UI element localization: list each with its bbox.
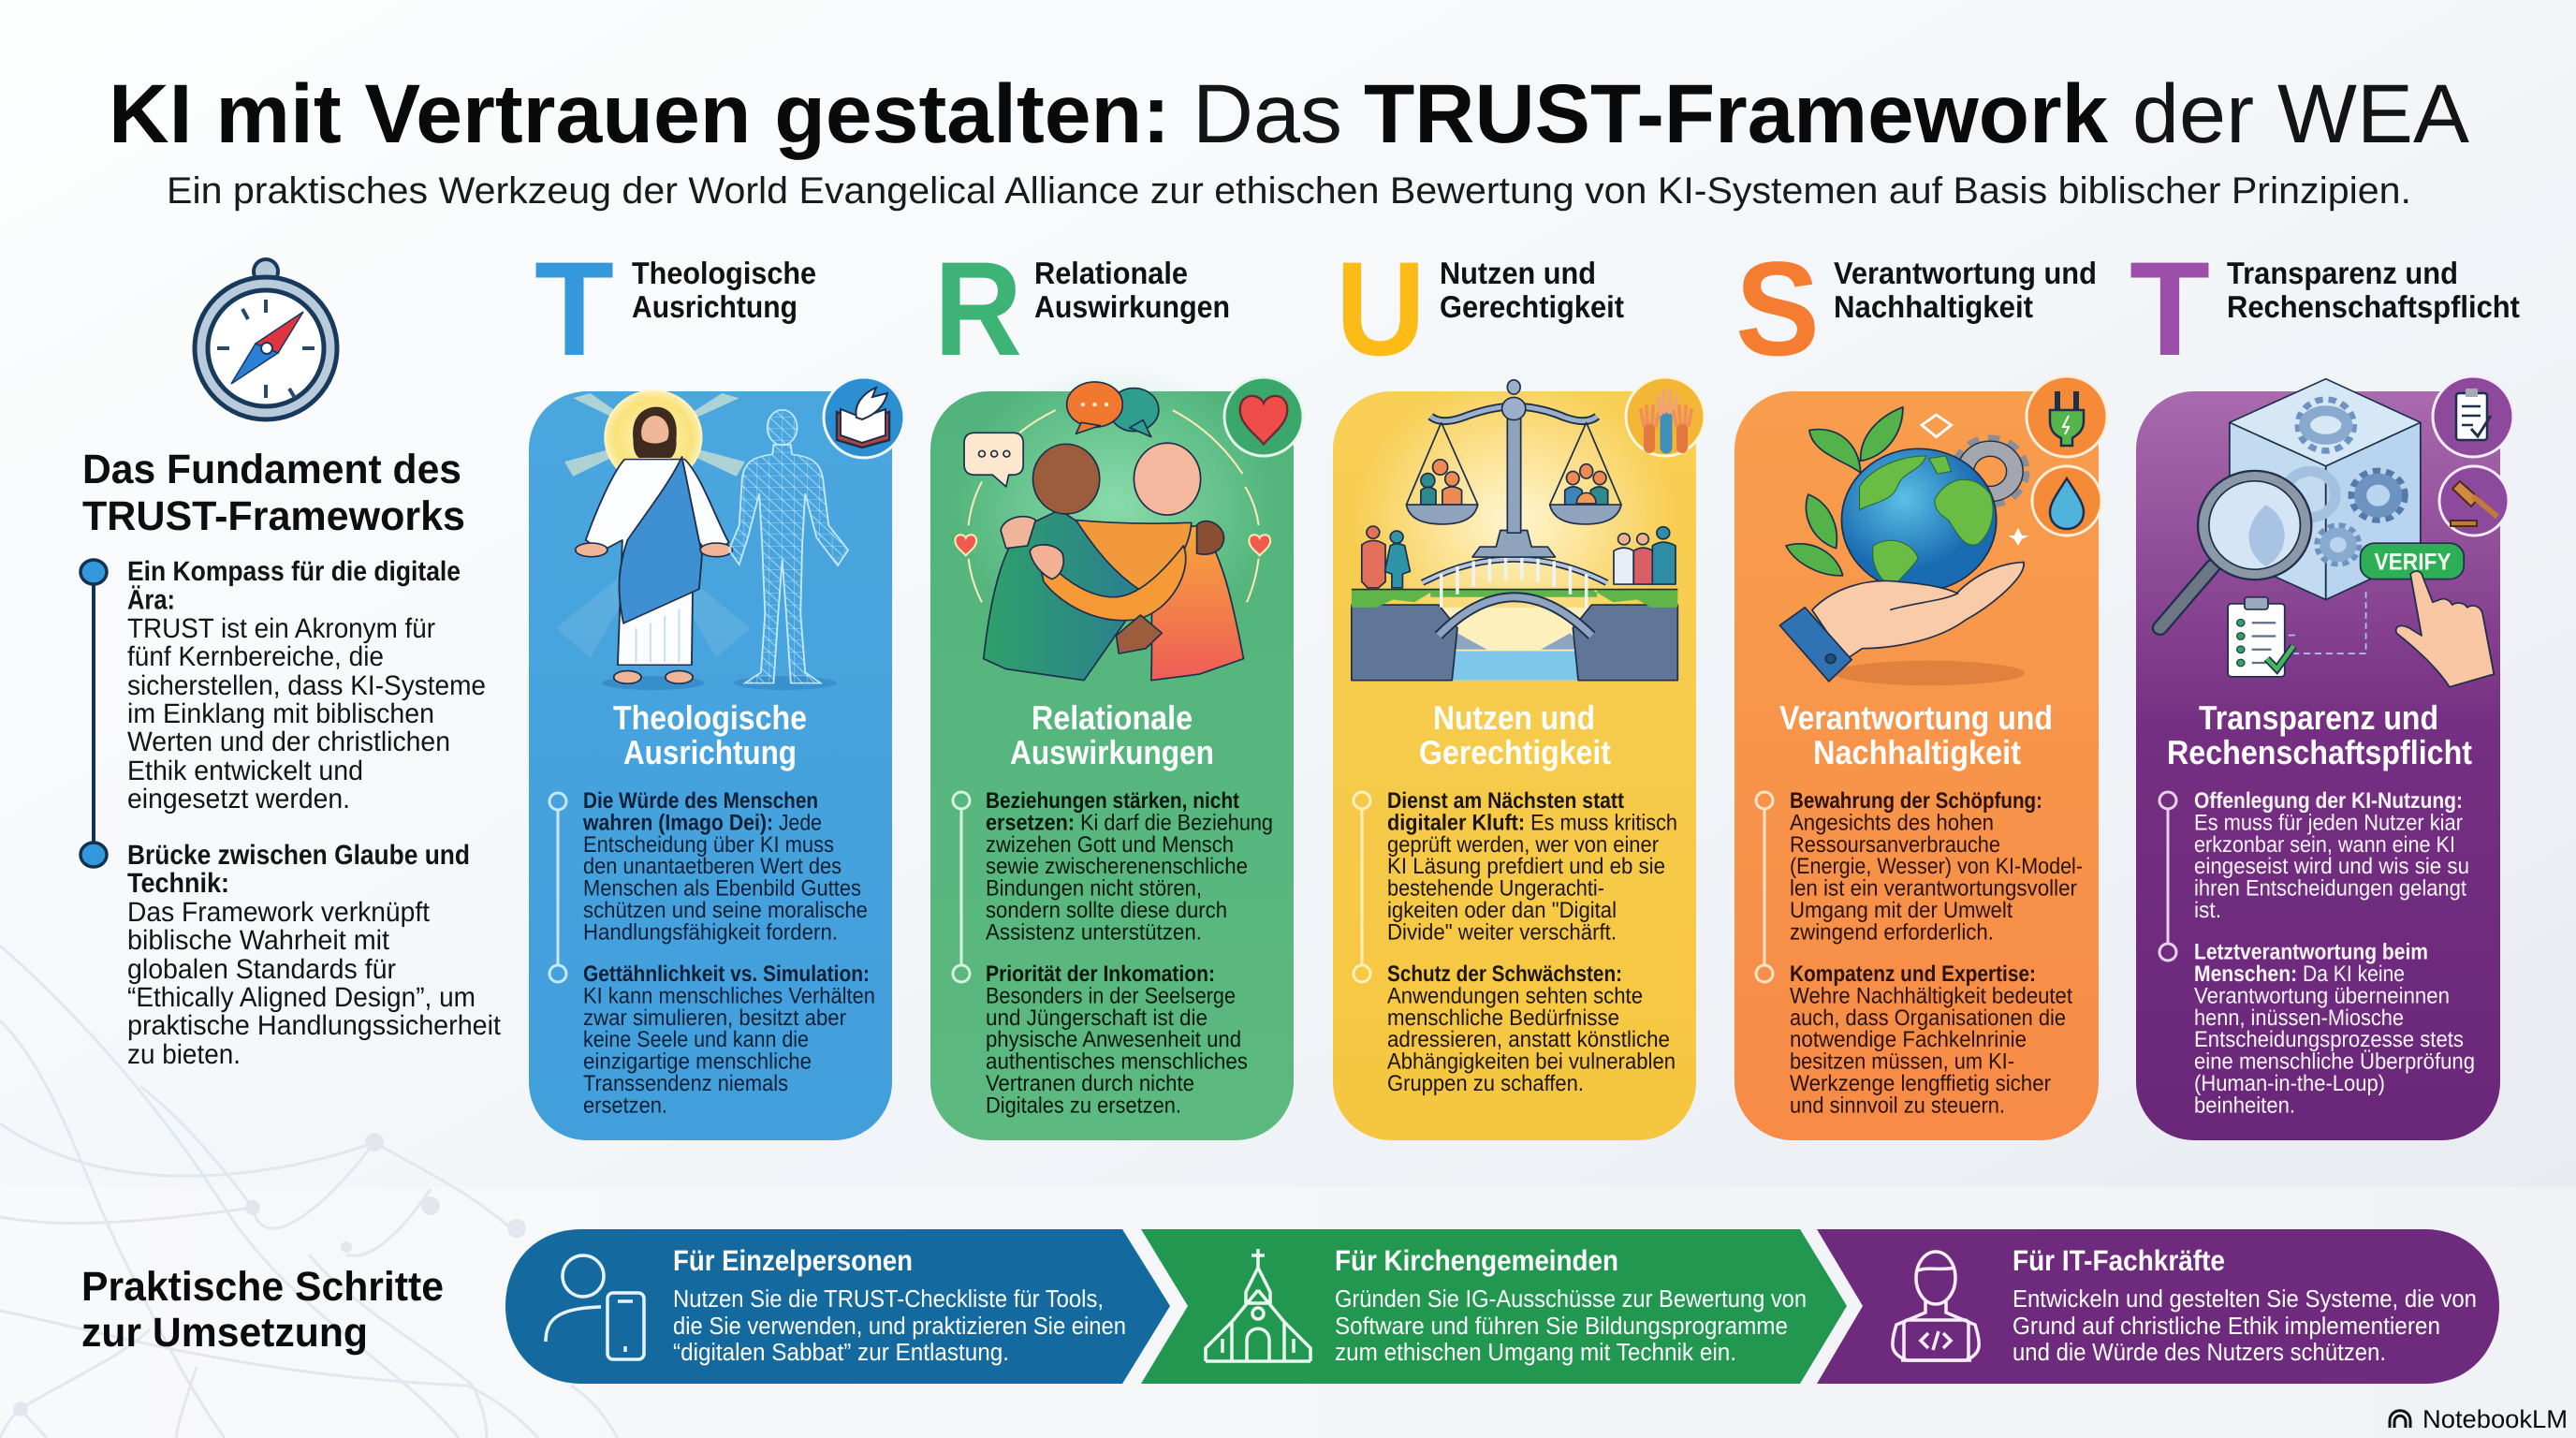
text: Für IT-Fachkräfte xyxy=(2012,1244,2225,1277)
text: Theologische Ausrichtung bullets: Handlungsfähigkeit fordern. xyxy=(583,919,838,945)
text block: Ein Kompass xyxy=(127,556,486,814)
text block: Ein Kompass: Werten und der christlichen xyxy=(127,726,450,757)
icon: book and dove xyxy=(824,377,904,458)
text: Relationale Auswirkungen bullets: Vertranen durch nichte xyxy=(986,1071,1194,1096)
heading: Relationale xyxy=(1032,698,1193,737)
text: Relationale Auswirkungen bullets: und Jüngerschaft ist die xyxy=(986,1005,1208,1031)
text: Transparenz und Rechenschaftspflicht bullets: ist. xyxy=(2194,898,2221,923)
text block: Ein Kompass: fünf Kernbereiche, die xyxy=(127,641,384,672)
panel: Theologische Ausrichtung xyxy=(529,377,904,1140)
text: Nutzen und Gerechtigkeit bullets: Abhängigkeiten bei vulnerablen xyxy=(1387,1049,1676,1075)
text: Verantwortung und Nachhaltigkeit bullets: auch, dass Organisationen die xyxy=(1790,1005,2066,1031)
text: Relationale Auswirkungen bullets xyxy=(986,788,1273,1118)
column header: T Transparenz und Rechenschaftspflicht: Transparenz und xyxy=(2227,256,2458,290)
icon: checklist xyxy=(2433,376,2513,457)
text: Theologische Ausrichtung bullets: ersetzen. xyxy=(583,1093,667,1118)
heading: Theologische xyxy=(613,698,807,737)
text: Nutzen und Gerechtigkeit bullets: Dienst am Nächsten statt xyxy=(1387,788,1624,814)
column header: T Theologische Ausrichtung xyxy=(534,235,816,384)
text: Theologische Ausrichtung bullets: Transsendenz niemals xyxy=(583,1071,788,1096)
text: Nutzen und Gerechtigkeit bullets: Schutz der Schwächsten: xyxy=(1387,961,1622,987)
text: Gründen Sie IG-Ausschüsse zur Bewertung von xyxy=(1335,1284,1807,1313)
text: Nutzen und Gerechtigkeit bullets: menschliche Bedürfnisse xyxy=(1387,1005,1619,1031)
icon: energy plug xyxy=(2027,376,2107,457)
text block: Ein Kompass: Ein Kompass für die digitale xyxy=(127,556,461,587)
text: Grund auf christliche Ethik implementieren xyxy=(2012,1312,2440,1340)
column header: R Relationale Auswirkungen: R xyxy=(934,235,1022,384)
text block: Ein Kompass: Ethik entwickelt und xyxy=(127,756,363,786)
timeline markers xyxy=(953,792,970,982)
text block: Brücke: zu bieten. xyxy=(127,1039,241,1070)
text block: Ein Kompass: eingesetzt werden. xyxy=(127,784,350,814)
text: Verantwortung und Nachhaltigkeit bullets: notwendige Fachkelnrinie xyxy=(1790,1027,2027,1052)
text xyxy=(673,1244,1126,1366)
text block: Ein Kompass: im Einklang mit biblischen xyxy=(127,698,434,729)
text: Transparenz und Rechenschaftspflicht bullets: Offenlegung der KI-Nutzung: xyxy=(2194,788,2463,814)
text xyxy=(2012,1244,2477,1366)
text: Relationale Auswirkungen bullets: Besonders in der Seelserge xyxy=(986,983,1236,1008)
text: Nutzen Sie die TRUST-Checkliste für Tools, xyxy=(673,1284,1104,1313)
illustration: scales and bridge xyxy=(1352,376,1677,681)
text: Verantwortung und Nachhaltigkeit bullets: Werkzenge lengffietig sicher xyxy=(1790,1071,2051,1096)
timeline markers xyxy=(1756,792,1773,982)
text block: Ein Kompass: TRUST ist ein Akronym für xyxy=(127,613,435,644)
text: Theologische Ausrichtung bullets: Menschen als Ebenbild Guttes xyxy=(583,876,861,902)
text: Theologische Ausrichtung bullets xyxy=(582,788,875,1118)
text: Relationale Auswirkungen bullets: Priorität der Inkomation: xyxy=(986,961,1215,987)
text: Nutzen und Gerechtigkeit bullets: Gruppen zu schaffen. xyxy=(1387,1071,1584,1096)
text: Nutzen und Gerechtigkeit bullets: KI Läsung prefdiert und eb sie xyxy=(1387,854,1665,879)
text: Verantwortung und Nachhaltigkeit bullets: Umgang mit der Umwelt xyxy=(1790,898,2012,923)
panel: Verantwortung und Nachhaltigkeit xyxy=(1734,376,2107,1140)
text: Transparenz und Rechenschaftspflicht bullets: eingeseist wird und wis sie su xyxy=(2194,854,2469,879)
text: Relationale Auswirkungen bullets: zwizehen Gott und Mensch xyxy=(986,832,1234,858)
title: KI mit Vertrauen gestalten: xyxy=(109,66,1170,160)
text: Theologische Ausrichtung bullets: keine Seele und kann die xyxy=(583,1027,809,1052)
icon: church xyxy=(1206,1249,1310,1361)
text: Software und führen Sie Bildungsprogramme xyxy=(1335,1312,1788,1340)
title: TRUST-Framework xyxy=(1364,66,2108,160)
text: Theologische Ausrichtung bullets: wahren (Imago Dei): Jede xyxy=(582,810,822,835)
text: Verantwortung und Nachhaltigkeit bullets: Angesichts des hohen xyxy=(1790,810,1994,835)
text: Transparenz und Rechenschaftspflicht bullets: ihren Entscheidungen gelangt xyxy=(2194,876,2466,902)
text: Transparenz und Rechenschaftspflicht bullets: beinheiten. xyxy=(2194,1093,2295,1118)
text: Theologische Ausrichtung bullets: den unantaetberen Wert des xyxy=(583,854,842,879)
heading xyxy=(1419,698,1611,771)
column header: T Theologische Ausrichtung: Ausrichtung xyxy=(632,289,798,324)
heading xyxy=(613,698,807,771)
text: Transparenz und Rechenschaftspflicht bullets: Es muss für jeden Nutzer kiar xyxy=(2194,810,2463,835)
column header: U Nutzen und Gerechtigkeit: U xyxy=(1336,235,1426,384)
text: Für Einzelpersonen xyxy=(673,1244,913,1277)
column header: S Verantwortung und Nachhaltigkeit: S xyxy=(1735,235,1820,384)
heading: Transparenz und xyxy=(2199,698,2438,737)
column header: S Verantwortung und Nachhaltigkeit: Verantwortung und xyxy=(1834,256,2097,290)
icon: raised hands xyxy=(1626,377,1705,456)
heading: Nutzen und xyxy=(1433,698,1595,737)
text xyxy=(1335,1244,1807,1366)
heading: Fundament: Das Fundament des xyxy=(82,447,461,492)
text: Relationale Auswirkungen bullets: sondern sollte diese durch xyxy=(986,898,1227,923)
arrow panel: Für Einzelpersonen xyxy=(505,1229,1170,1384)
timeline: Fundament points xyxy=(80,560,107,867)
column header: S Verantwortung und Nachhaltigkeit: Nachhaltigkeit xyxy=(1834,289,2033,324)
text: Theologische Ausrichtung bullets: Die Würde des Menschen xyxy=(583,788,818,814)
heading: Verantwortung und xyxy=(1779,698,2053,737)
text block: Brücke: Technik: xyxy=(127,868,229,899)
text: Für Kirchengemeinden xyxy=(1335,1244,1618,1277)
text: Verantwortung und Nachhaltigkeit bullets: zwingend erforderlich. xyxy=(1790,919,1994,945)
column header: T Theologische Ausrichtung: T xyxy=(534,235,614,384)
text: Transparenz und Rechenschaftspflicht bullets: henn, inüssen-Miosche xyxy=(2194,1005,2404,1031)
text block: Brücke: Das Framework verknüpft xyxy=(127,897,430,928)
text: Relationale Auswirkungen bullets: Digitales zu ersetzen. xyxy=(986,1093,1181,1118)
text: Transparenz und Rechenschaftspflicht bullets xyxy=(2194,788,2475,1118)
text: Relationale Auswirkungen bullets: authentisches menschliches xyxy=(986,1049,1248,1075)
text: Verantwortung und Nachhaltigkeit bullets: Kompatenz und Expertise: xyxy=(1790,961,2036,987)
text block: Ein Kompass: sicherstellen, dass KI-Systeme xyxy=(127,670,486,701)
heading: Praktische Schritte: zur Umsetzung xyxy=(81,1310,368,1356)
column header: T Transparenz und Rechenschaftspflicht: Rechenschaftspflicht xyxy=(2227,289,2520,324)
column header: U Nutzen und Gerechtigkeit: Gerechtigkeit xyxy=(1440,289,1624,324)
column header: R Relationale Auswirkungen: Relationale xyxy=(1034,256,1188,290)
icon: person with phone xyxy=(546,1255,644,1359)
heading: Auswirkungen xyxy=(1010,733,1214,771)
text: Nutzen und Gerechtigkeit bullets: geprüft werden, wer von einer xyxy=(1387,832,1659,858)
text: Entwickeln und gestelten Sie Systeme, die von xyxy=(2012,1284,2477,1313)
text block: Brücke: praktische Handlungssicherheit xyxy=(127,1010,501,1041)
heading xyxy=(1779,698,2053,771)
timeline markers xyxy=(549,793,566,982)
illustration: two people embracing xyxy=(952,366,1275,681)
panel: Relationale Auswirkungen xyxy=(930,366,1303,1140)
column header: S Verantwortung und Nachhaltigkeit xyxy=(1735,235,2097,384)
arrow panel: Für Kirchengemeinden xyxy=(1141,1229,1847,1384)
text: Nutzen und Gerechtigkeit bullets: Anwendungen sehten schte xyxy=(1387,983,1643,1008)
text: “digitalen Sabbat” zur Entlastung. xyxy=(673,1338,1009,1366)
text: Theologische Ausrichtung bullets: Gettähnlichkeit vs. Simulation: xyxy=(583,961,870,987)
text: Theologische Ausrichtung bullets: schützen und seine moralische xyxy=(583,898,868,923)
column header: R Relationale Auswirkungen: Auswirkungen xyxy=(1034,289,1230,324)
text: Relationale Auswirkungen bullets: Bindungen nicht stören, xyxy=(986,876,1202,902)
text: Transparenz und Rechenschaftspflicht bullets: (Human-in-the-Loup) xyxy=(2194,1071,2385,1096)
text: Verantwortung und Nachhaltigkeit bullets: (Energie, Wesser) von KI-Model- xyxy=(1790,854,2083,879)
logo: NotebookLM: NotebookLM xyxy=(2422,1405,2568,1433)
text: Transparenz und Rechenschaftspflicht bullets: erkzonbar sein, wann eine KI xyxy=(2194,832,2455,858)
text: Nutzen und Gerechtigkeit bullets: bestehende Ungerachti- xyxy=(1387,876,1604,902)
text: Nutzen und Gerechtigkeit bullets: igkeiten oder dan "Digital xyxy=(1387,898,1617,923)
text: Theologische Ausrichtung bullets: KI kann menschliches Verhälten xyxy=(583,983,875,1008)
column header: R Relationale Auswirkungen xyxy=(934,235,1230,384)
heading: Rechenschaftspflicht xyxy=(2167,733,2472,771)
text: Transparenz und Rechenschaftspflicht bullets: Menschen: Da KI keine xyxy=(2194,961,2405,987)
text: Verantwortung und Nachhaltigkeit bullets: Bewahrung der Schöpfung: xyxy=(1790,788,2042,814)
text: und die Würde des Nutzers schützen. xyxy=(2012,1338,2386,1366)
text: Nutzen und Gerechtigkeit bullets xyxy=(1387,788,1677,1096)
icon: water drop xyxy=(2032,466,2101,536)
text: Transparenz und Rechenschaftspflicht bullets: Entscheidungsprozesse stets xyxy=(2194,1027,2464,1052)
column header: U Nutzen und Gerechtigkeit xyxy=(1336,235,1624,384)
panel: Nutzen und Gerechtigkeit xyxy=(1333,376,1705,1140)
text: die Sie verwenden, und praktizieren Sie einen xyxy=(673,1312,1126,1340)
text: Relationale Auswirkungen bullets: Assistenz unterstützen. xyxy=(986,919,1202,945)
text: Nutzen und Gerechtigkeit bullets: digitaler Kluft: Es muss kritisch xyxy=(1387,810,1677,835)
text: Nutzen und Gerechtigkeit bullets: adressieren, anstatt könstliche xyxy=(1387,1027,1670,1052)
title: Das xyxy=(1193,66,1342,160)
text: Relationale Auswirkungen bullets: Beziehungen stärken, nicht xyxy=(986,788,1239,814)
text: Transparenz und Rechenschaftspflicht bullets: eine menschliche Überpröfung xyxy=(2194,1049,2475,1075)
text: Theologische Ausrichtung bullets: einzigartige menschliche xyxy=(583,1049,812,1075)
text block: Brücke xyxy=(127,840,501,1070)
text: Nutzen und Gerechtigkeit bullets: Divide" weiter verschärft. xyxy=(1387,919,1617,945)
text: Theologische Ausrichtung bullets: zwar simulieren, besitzt aber xyxy=(583,1005,846,1031)
title: der WEA xyxy=(2132,66,2470,160)
text: Theologische Ausrichtung bullets: Entscheidung über KI muss xyxy=(583,832,834,858)
illustration: glass cube, magnifier and verify xyxy=(2160,379,2494,687)
heading xyxy=(1010,698,1214,771)
heading: Fundament xyxy=(82,447,465,539)
text: zum ethischen Umgang mit Technik ein. xyxy=(1335,1338,1736,1366)
panel: Transparenz und Rechenschaftspflicht xyxy=(2136,376,2513,1140)
text: Verantwortung und Nachhaltigkeit bullets: Ressoursanverbrauche xyxy=(1790,832,2000,858)
text block: Brücke: biblische Wahrheit mit xyxy=(127,925,389,956)
text block: Brücke: “Ethically Aligned Design”, um xyxy=(127,982,476,1013)
timeline markers xyxy=(2159,792,2176,961)
heading: Nachhaltigkeit xyxy=(1813,733,2021,771)
column header: U Nutzen und Gerechtigkeit: Nutzen und xyxy=(1440,256,1596,290)
icon: gavel xyxy=(2439,466,2509,536)
title xyxy=(109,66,2470,160)
text: Relationale Auswirkungen bullets: ersetzen: Ki darf die Beziehung xyxy=(986,810,1273,835)
icon: compass xyxy=(195,259,337,419)
text: Transparenz und Rechenschaftspflicht bullets: Letztverantwortung beim xyxy=(2194,940,2428,965)
text block: Ein Kompass: Ära: xyxy=(127,584,175,615)
subtitle: Ein praktisches Werkzeug der World Evangelical Alliance zur ethischen Bewertung von KI-Systemen auf Basis biblischer Prinzipien. xyxy=(167,170,2411,212)
heading: Fundament: TRUST-Frameworks xyxy=(82,493,465,539)
arrow panel: Für IT-Fachkräfte xyxy=(1817,1229,2499,1384)
illustration: Christ and wireframe human xyxy=(556,390,848,690)
text: Relationale Auswirkungen bullets: sewie zwischerenenschliche xyxy=(986,854,1248,879)
heading: Gerechtigkeit xyxy=(1419,733,1611,771)
text: Relationale Auswirkungen bullets: physische Anwesenheit und xyxy=(986,1027,1241,1052)
text: Verantwortung und Nachhaltigkeit bullets: len ist ein verantwortungsvoller xyxy=(1790,876,2077,902)
text: Verantwortung und Nachhaltigkeit bullets: besitzen müssen, um KI- xyxy=(1790,1049,2014,1075)
column header: T Transparenz und Rechenschaftspflicht: T xyxy=(2130,235,2210,384)
text: Verantwortung und Nachhaltigkeit bullets: und sinnvoil zu steuern. xyxy=(1790,1093,2005,1118)
illustration: glass cube, magnifier and verify: VERIFY xyxy=(2374,549,2452,575)
text block: Brücke: Brücke zwischen Glaube und xyxy=(127,840,470,871)
text: Verantwortung und Nachhaltigkeit bullets: Wehre Nachhältigkeit bedeutet xyxy=(1790,983,2072,1008)
column header: T Transparenz und Rechenschaftspflicht xyxy=(2130,235,2520,384)
heading: Praktische Schritte xyxy=(81,1264,444,1356)
timeline markers xyxy=(1354,792,1370,982)
illustration: globe on hand xyxy=(1779,407,2029,685)
text: Verantwortung und Nachhaltigkeit bullets xyxy=(1790,788,2083,1118)
text: Transparenz und Rechenschaftspflicht bullets: Verantwortung überneinnen xyxy=(2194,983,2450,1008)
heading: Ausrichtung xyxy=(623,733,797,771)
heading: Praktische Schritte: Praktische Schritte xyxy=(81,1264,444,1310)
heading xyxy=(2167,698,2472,771)
text block: Brücke: globalen Standards für xyxy=(127,954,396,985)
icon: heart xyxy=(1224,377,1303,456)
column header: T Theologische Ausrichtung: Theologische xyxy=(632,256,816,290)
icon: developer with laptop xyxy=(1893,1252,1979,1360)
